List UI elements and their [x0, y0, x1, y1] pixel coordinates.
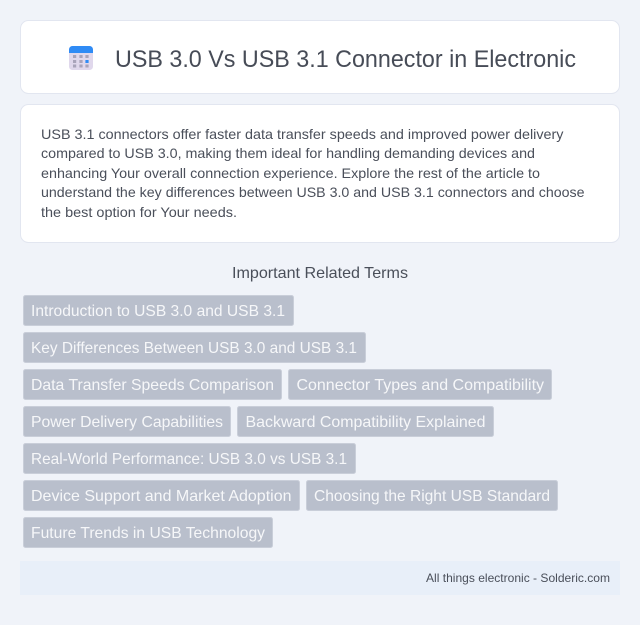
tag: device support [24, 480, 300, 510]
tag: future trends [24, 518, 272, 548]
tag: power delivery: Power Delivery Capabilities [31, 414, 223, 431]
text block: intro paragraph: USB 3.1 connectors offer faster data transfer speeds and improved power delivery [41, 126, 564, 142]
text block: intro paragraph: enhancing Your overall connection experience. Explore the rest of the article to [41, 165, 540, 181]
panel: related term tags [24, 296, 558, 548]
tag: connector types [288, 370, 552, 400]
icon: calendar grid [69, 46, 93, 70]
text block: intro paragraph: the best option for Your needs. [41, 204, 237, 220]
footer [20, 561, 620, 595]
panel: intro description [20, 104, 620, 242]
tag: data transfer speeds: Data Transfer Speeds Comparison [31, 377, 274, 394]
tag: backward compatibility: Backward Compatibility Explained [246, 414, 486, 431]
tag: real-world performance [24, 444, 356, 474]
heading: important related terms: Important Related Terms [232, 265, 408, 282]
tag: power delivery [24, 406, 230, 436]
text block: intro paragraph: compared to USB 3.0, making them ideal for handling demanding devices and [41, 145, 535, 161]
tag: choosing standard [306, 480, 558, 510]
text block: intro paragraph [41, 126, 585, 220]
tag: device support: Device Support and Market Adoption [31, 488, 292, 505]
tag: connector types: Connector Types and Compatibility [296, 377, 544, 394]
tag: introduction: Introduction to USB 3.0 and USB 3.1 [31, 303, 285, 320]
title: USB 3.0 Vs USB 3.1 Connector in Electronic [115, 46, 576, 73]
tag: future trends: Future Trends in USB Technology [31, 525, 265, 542]
tag: data transfer speeds [24, 370, 282, 400]
tag: key differences: Key Differences Between USB 3.0 and USB 3.1 [31, 340, 357, 357]
tag: real-world performance: Real-World Performance: USB 3.0 vs USB 3.1 [31, 451, 347, 468]
footer credit: All things electronic - Solderic.com [426, 571, 610, 585]
tag: choosing standard: Choosing the Right USB Standard [314, 488, 550, 505]
tag: backward compatibility [238, 406, 494, 436]
tag: introduction [24, 296, 294, 326]
text block: intro paragraph: understand the key differences between USB 3.0 and USB 3.1 connectors and choose [41, 184, 585, 200]
panel: title header [20, 20, 620, 94]
tag: key differences [24, 332, 366, 362]
